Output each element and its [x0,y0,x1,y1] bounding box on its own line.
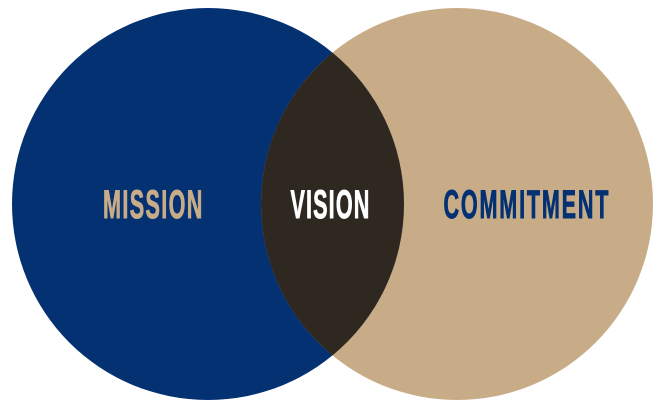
label: mission: MISSION [103,182,202,227]
label: commitment: COMMITMENT [444,182,609,227]
label: vision: VISION [290,182,369,227]
circle: commitment [261,8,653,400]
overlap: vision [261,53,404,355]
circle: mission [12,8,404,400]
